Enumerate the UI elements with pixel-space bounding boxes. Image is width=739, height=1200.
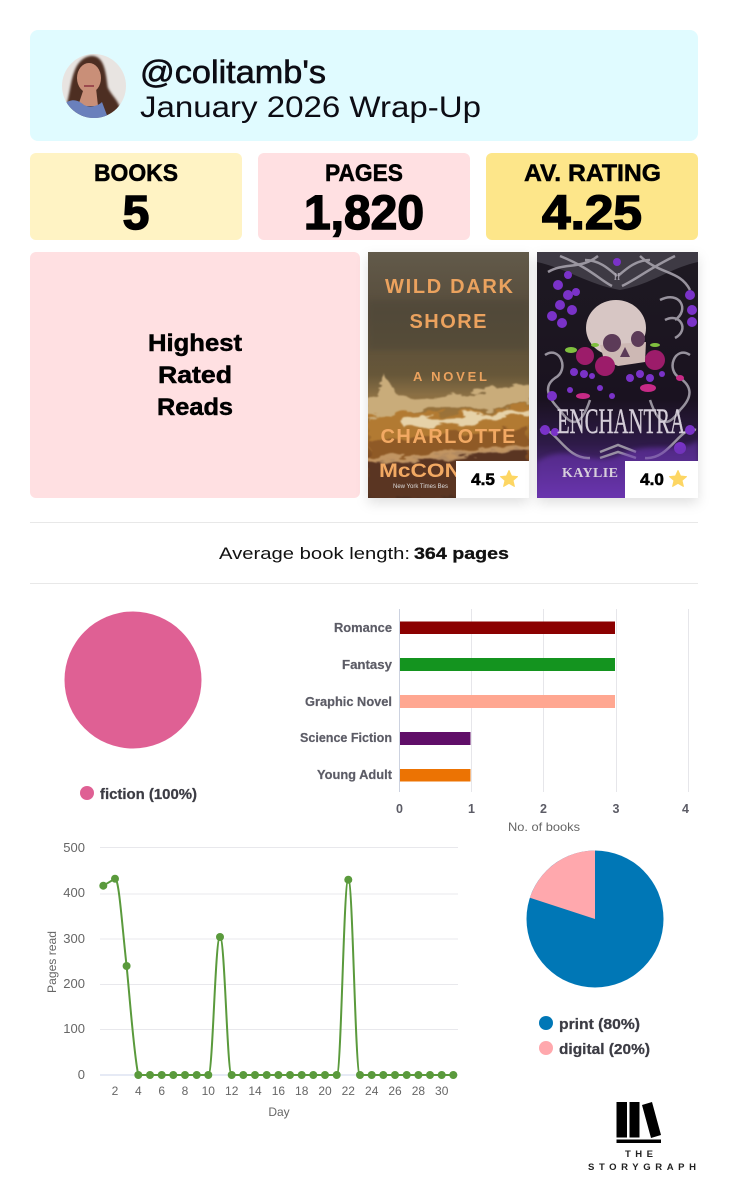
username: @colitamb's (140, 54, 326, 90)
bar chart: genres (300, 609, 689, 834)
stat: books: 5 (123, 187, 149, 240)
bar chart: genres: Young Adult (317, 768, 393, 782)
panel: highest rated reads: Reads (157, 394, 233, 421)
bar chart: genres: 2 (540, 802, 547, 816)
book cover: Wild Dark Shore: A NOVEL (413, 369, 487, 384)
line chart: pages read per day: 28 (412, 1084, 425, 1098)
average book length (30, 522, 698, 584)
stat: pages: 1,820 (304, 187, 424, 240)
header panel (30, 30, 698, 141)
bar chart: genres: 3 (613, 802, 620, 816)
stat: books (30, 153, 242, 240)
book cover: Wild Dark Shore (368, 252, 529, 498)
rating badge (625, 461, 698, 498)
line chart: pages read per day (45, 840, 458, 1119)
line chart: pages read per day: 18 (295, 1084, 309, 1098)
line chart: pages read per day: 6 (158, 1084, 165, 1098)
book cover: Wild Dark Shore: WILD DARK (385, 276, 514, 298)
pie chart: print vs digital (526, 850, 664, 1058)
line chart: pages read per day: 16 (272, 1084, 285, 1098)
book cover: Enchantra: KAYLIE (562, 466, 618, 481)
bar chart: genres: Science Fiction (300, 731, 392, 745)
line chart: pages read per day: Day (268, 1105, 290, 1119)
bar chart: genres: 1 (468, 802, 475, 816)
rating badge: 4.0 (640, 470, 664, 489)
book cover: Enchantra: II (614, 272, 620, 283)
avatar (62, 54, 126, 118)
line chart: pages read per day: 12 (225, 1084, 239, 1098)
line chart: pages read per day: 14 (248, 1084, 262, 1098)
logo: The StoryGraph (588, 1102, 696, 1173)
book cover: Wild Dark Shore: SHORE (410, 311, 486, 333)
line chart: pages read per day: 20 (318, 1084, 332, 1098)
stat: average rating (486, 153, 698, 240)
bar chart: genres: Fantasy (342, 658, 392, 672)
legend: digital: digital (20%) (559, 1042, 650, 1058)
line chart: pages read per day: 300 (63, 931, 85, 946)
bar chart: genres: Romance (334, 621, 392, 635)
line chart: pages read per day: 8 (182, 1084, 189, 1098)
roses (576, 347, 665, 376)
average book length: 364 pages (414, 544, 509, 563)
rating badge (456, 461, 529, 498)
bar chart: genres: Graphic Novel (305, 695, 392, 709)
bar chart: genres: 0 (396, 802, 403, 816)
legend: fiction: fiction (100%) (100, 787, 197, 803)
panel: highest rated reads (30, 252, 360, 498)
book cover: Wild Dark Shore: CHARLOTTE (380, 426, 516, 448)
line chart: pages read per day: 400 (63, 885, 85, 900)
rating badge: 4.5 (471, 470, 495, 489)
panel: highest rated reads: Rated (158, 362, 232, 389)
line chart: pages read per day: Pages read (45, 931, 59, 993)
bar chart: genres: No. of books (508, 820, 580, 834)
average book length: Average book length: (219, 544, 410, 563)
stat: books: BOOKS (94, 160, 178, 187)
line chart: pages read per day: 26 (388, 1084, 402, 1098)
bar chart: genres: 4 (682, 802, 689, 816)
book cover: Wild Dark Shore: New York Times Bes (393, 484, 448, 490)
line chart: pages read per day: 30 (435, 1084, 449, 1098)
line chart: pages read per day: 22 (342, 1084, 355, 1098)
legend: print (539, 1016, 640, 1033)
stat: average rating: AV. RATING (524, 160, 661, 187)
book cover: Enchantra (537, 252, 698, 498)
stat: pages (258, 153, 470, 240)
line chart: pages read per day: 500 (63, 840, 85, 855)
line chart: pages read per day: 10 (202, 1084, 215, 1098)
stat: pages: PAGES (325, 160, 403, 187)
line chart: pages read per day: 24 (365, 1084, 379, 1098)
logo: The StoryGraph: STORYGRAPH (588, 1162, 696, 1173)
skull (586, 300, 646, 366)
line chart: pages read per day: 200 (63, 976, 85, 991)
line chart: pages read per day: 0 (78, 1067, 85, 1082)
stat: average rating: 4.25 (542, 187, 642, 240)
legend: print: print (80%) (559, 1017, 640, 1033)
line chart: pages read per day: 2 (112, 1084, 119, 1098)
line chart: pages read per day: 4 (135, 1084, 142, 1098)
book cover: Wild Dark Shore: McCON (379, 461, 461, 482)
logo: The StoryGraph: THE (625, 1149, 653, 1160)
pie chart: fiction (64, 612, 202, 803)
panel: highest rated reads: Highest (148, 330, 242, 357)
subtitle: January 2026 Wrap-Up (140, 91, 481, 124)
line chart: pages read per day: 100 (63, 1021, 85, 1036)
